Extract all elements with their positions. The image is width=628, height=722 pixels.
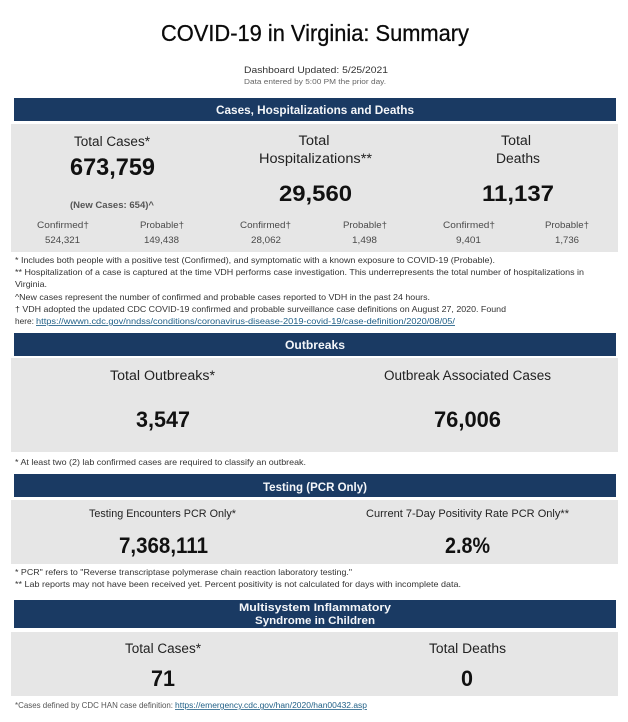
footnotes: cases: here:: [15, 316, 34, 326]
header bar: outbreaks: Outbreaks: [285, 340, 345, 352]
stat: total deaths: [443, 133, 589, 245]
header bar: MIS-C: Syndrome in Children: [255, 615, 375, 627]
stat: outbreak associated cases: [384, 368, 551, 432]
stat: total hospitalizations: 28,062: [251, 235, 281, 245]
header bar: cases: Cases, Hospitalizations and Deaths: [216, 105, 414, 117]
section: multisystem inflammatory syndrome in children: [11, 600, 618, 710]
title: COVID-19 in Virginia: Summary: [161, 20, 469, 46]
stat: total hospitalizations: Total: [298, 133, 330, 148]
stat: MIS-C total deaths: 0: [461, 666, 473, 691]
stat: MIS-C total cases: 71: [151, 666, 175, 691]
panel: outbreak stats: [11, 358, 618, 452]
panel: MIS-C stats: [11, 632, 618, 696]
stat: positivity rate: Current 7-Day Positivity Rate PCR Only**: [366, 508, 570, 520]
panel: testing stats: [11, 500, 618, 564]
stat: outbreak associated cases: 76,006: [434, 407, 501, 432]
stat: total deaths: 9,401: [456, 235, 481, 245]
stat: total deaths: Deaths: [496, 151, 540, 166]
stat: positivity rate: 2.8%: [445, 533, 490, 558]
stat: total deaths: Total: [501, 133, 531, 148]
data entry note: Data entered by 5:00 PM the prior day.: [244, 77, 386, 86]
stat: total cases: Total Cases*: [74, 134, 151, 149]
stat: total deaths: 1,736: [555, 235, 579, 245]
header bar: cases: [14, 98, 616, 121]
stat: testing encounters: 7,368,111: [119, 533, 208, 558]
stat: MIS-C total cases: [125, 641, 202, 691]
footnotes: testing: [15, 567, 461, 589]
stat: total hospitalizations: Probable†: [343, 220, 387, 230]
footnotes: cases: https://wwwn.cdc.gov/nndss/conditions/coronavirus-disease-2019-covid-19/case-definition/2020/08/05/: [36, 316, 456, 326]
stat: total hospitalizations: [240, 133, 387, 245]
footnote: MIS-C case definition: [15, 701, 368, 710]
header bar: testing: Testing (PCR Only): [263, 482, 367, 494]
footnote: outbreaks: * At least two (2) lab confirmed cases are required to classify an outbreak.: [15, 457, 306, 467]
footnotes: cases: [15, 255, 584, 326]
stat: MIS-C total deaths: [429, 641, 506, 691]
panel: cases stats: [11, 124, 618, 252]
stat: outbreak associated cases: Outbreak Associated Cases: [384, 368, 551, 383]
stat: total hospitalizations: 1,498: [352, 235, 377, 245]
stat: total outbreaks: 3,547: [136, 407, 190, 432]
stat: total outbreaks: Total Outbreaks*: [110, 368, 216, 383]
stat: total deaths: 11,137: [482, 181, 554, 206]
stat: testing encounters: Testing Encounters PCR Only*: [89, 508, 237, 520]
stat: positivity rate: [366, 508, 570, 558]
stat: testing encounters: [89, 508, 237, 558]
footnote: MIS-C case definition: https://emergency.cdc.gov/han/2020/han00432.asp: [175, 701, 368, 710]
stat: total cases: 524,321: [45, 235, 80, 245]
footnotes: testing: * PCR" refers to "Reverse transcriptase polymerase chain reaction laboratory testing.": [15, 567, 352, 577]
section: cases, hospitalizations and deaths: [11, 98, 618, 326]
stat: total hospitalizations: Confirmed†: [240, 220, 291, 230]
stat: total deaths: Probable†: [545, 220, 589, 230]
stat: total cases: Probable†: [140, 220, 184, 230]
footnote: MIS-C case definition: *Cases defined by CDC HAN case definition:: [15, 701, 173, 710]
footnotes: cases: † VDH adopted the updated CDC COVID-19 confirmed and probable surveillance case definitions on August 27, 2020. Found: [15, 304, 506, 314]
stat: total cases: [37, 134, 184, 245]
stat: total hospitalizations: Hospitalizations**: [259, 151, 373, 166]
stat: total cases: Confirmed†: [37, 220, 89, 230]
stat: total cases: (New Cases: 654)^: [70, 200, 154, 211]
header bar: outbreaks: [14, 333, 616, 356]
footnotes: cases: ^New cases represent the number of confirmed and probable cases reported to VDH in the past 24 hours.: [15, 292, 430, 302]
stat: MIS-C total deaths: Total Deaths: [429, 641, 506, 656]
header bar: MIS-C: Multisystem Inflammatory: [239, 602, 392, 614]
header bar: testing: [14, 474, 616, 497]
footnotes: cases: ** Hospitalization of a case is captured at the time VDH performs case investigation. This underrepresents the total number of hospitalizations in: [15, 267, 584, 277]
header bar: MIS-C: [14, 600, 616, 628]
footnotes: cases: Virginia.: [15, 279, 47, 289]
stat: total hospitalizations: 29,560: [279, 181, 352, 206]
stat: total outbreaks: [110, 368, 216, 432]
stat: total deaths: Confirmed†: [443, 220, 495, 230]
stat: MIS-C total cases: Total Cases*: [125, 641, 202, 656]
section: testing: [11, 474, 618, 589]
dashboard update date: Dashboard Updated: 5/25/2021: [244, 65, 388, 76]
footnotes: cases: * Includes both people with a positive test (Confirmed), and symptomatic with a known exposure to COVID-19 (Probable).: [15, 255, 495, 265]
section: outbreaks: [11, 333, 618, 467]
stat: total cases: 149,438: [144, 235, 179, 245]
footnotes: testing: ** Lab reports may not have been received yet. Percent positivity is not calculated for days with incomplete data.: [15, 579, 461, 589]
stat: total cases: 673,759: [70, 154, 155, 181]
